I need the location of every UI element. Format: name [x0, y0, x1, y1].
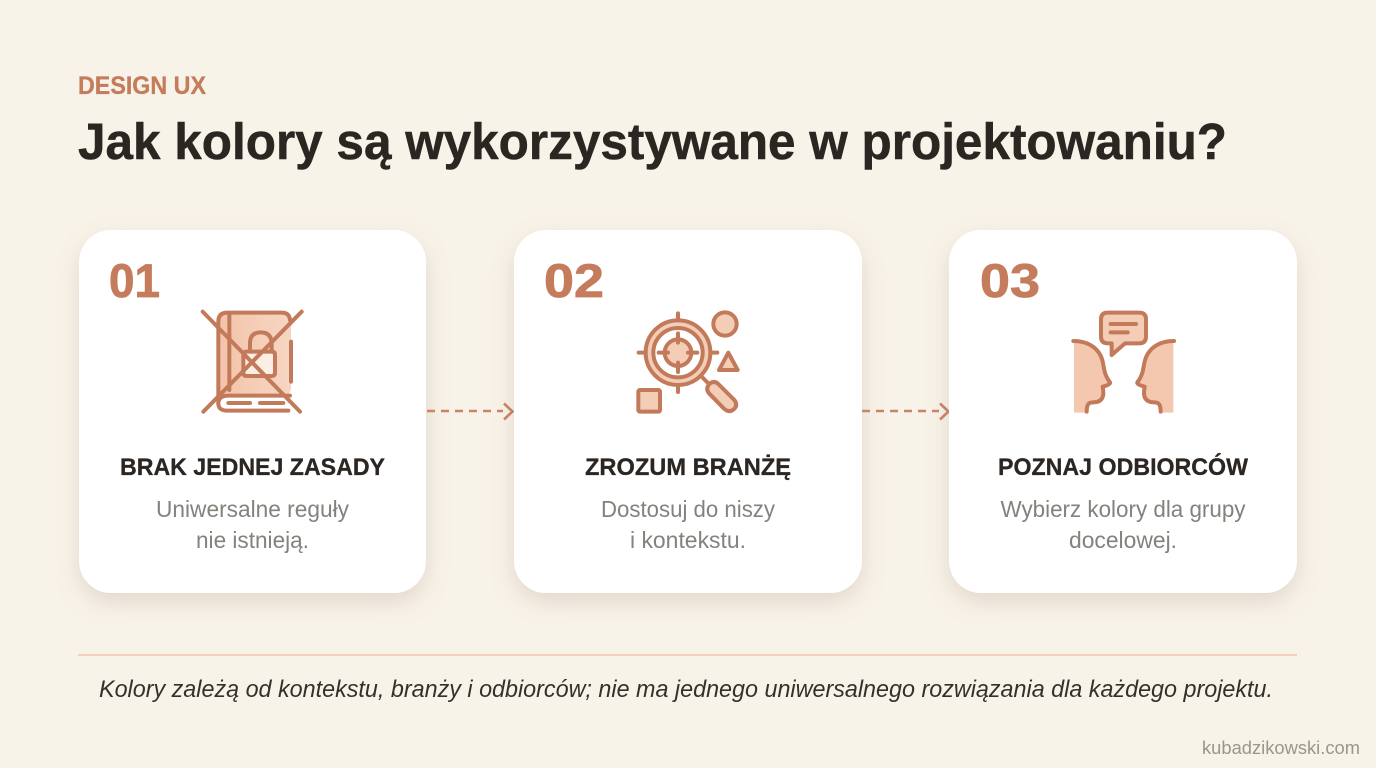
description: [601, 496, 775, 553]
footer summary: Kolory zależą od kontekstu, branży i odbiorców; nie ma jednego uniwersalnego rozwiązania dla każdego projektu.: [99, 676, 1273, 703]
panel: card 03: [949, 230, 1297, 593]
source credit: kubadzikowski.com: [1202, 738, 1360, 758]
description: i kontekstu.: [630, 527, 746, 553]
panel: card 01: [79, 230, 426, 593]
icon: crossed-out rule book: [203, 312, 302, 412]
description: docelowej.: [1069, 527, 1177, 553]
panel: card 02: [514, 230, 862, 593]
number 03: 03: [980, 254, 1040, 307]
description: Uniwersalne reguły: [156, 496, 349, 522]
number 02: 02: [544, 254, 604, 307]
eyebrow: DESIGN UX: DESIGN UX: [78, 72, 206, 100]
icon: two faces with speech bubble: [1073, 313, 1174, 413]
description: [156, 496, 349, 553]
heading: POZNAJ ODBIORCÓW: [998, 453, 1248, 481]
icon: magnifier with target and shapes: [638, 312, 738, 412]
title: Jak kolory są wykorzystywane w projektowaniu?: [78, 113, 1227, 170]
number 01: 01: [109, 254, 160, 307]
heading: BRAK JEDNEJ ZASADY: [120, 454, 385, 481]
description: Dostosuj do niszy: [601, 496, 775, 522]
arrow 1 to 2: [427, 404, 512, 420]
arrow 2 to 3: [862, 404, 948, 420]
description: nie istnieją.: [196, 527, 309, 553]
description: [1000, 496, 1246, 553]
description: Wybierz kolory dla grupy: [1000, 496, 1246, 522]
heading: ZROZUM BRANŻĘ: [585, 454, 791, 481]
